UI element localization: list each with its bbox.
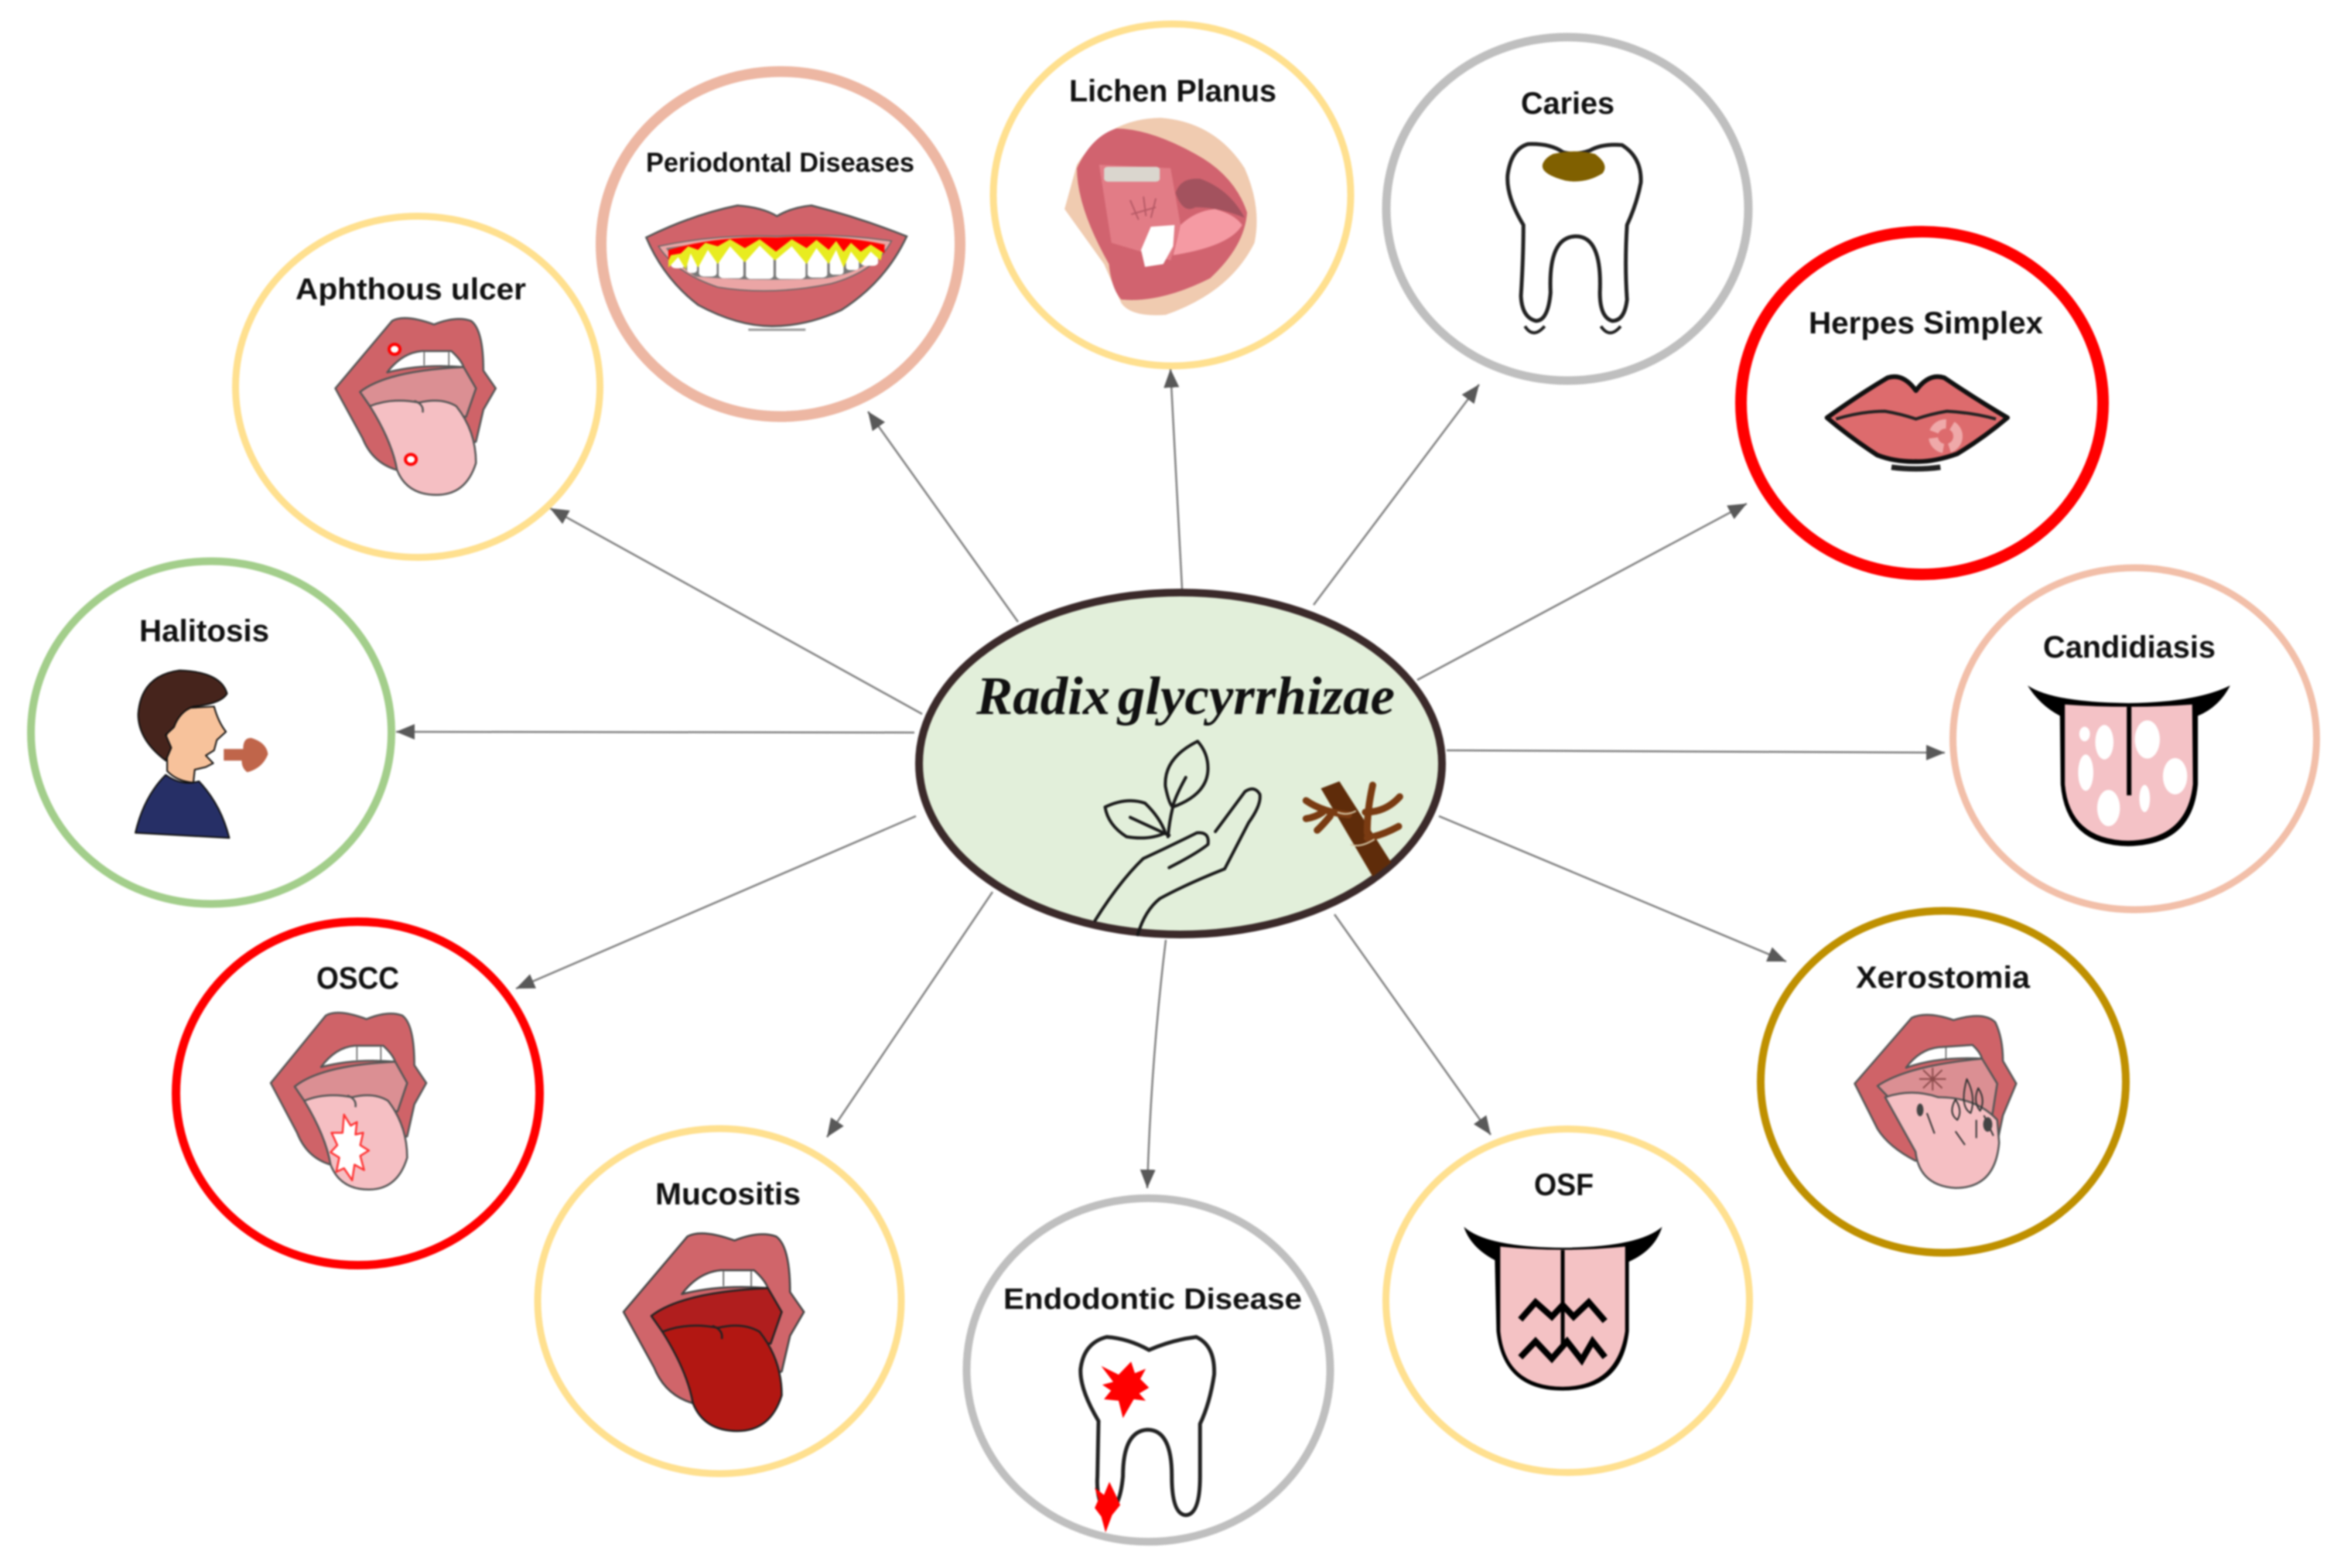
- panel: OSF: [1386, 1129, 1750, 1473]
- icon: smile with inflamed gums: [646, 206, 907, 330]
- icon: tooth with cavity: [1508, 144, 1641, 333]
- panel: Endodontic Disease: [967, 1198, 1331, 1542]
- panel: Halitosis: [31, 562, 391, 904]
- arrow: to Xerostomia: [1439, 816, 1786, 962]
- heading: Radix glycyrrhizae: Radix glycyrrhizae: [976, 667, 1395, 726]
- arrow: to Lichen Planus: [1170, 369, 1182, 589]
- arrow: to Periodontal Diseases: [868, 412, 1018, 622]
- panel: Periodontal Diseases: [601, 71, 960, 416]
- icon: mouth with ulcers: [336, 318, 496, 495]
- panel: Mucositis: [538, 1129, 901, 1474]
- icon: lips with cold sore: [1827, 377, 2007, 469]
- panel: Candidiasis: [1953, 568, 2316, 910]
- label: Aphthous ulcer: Aphthous ulcer: [296, 273, 526, 306]
- arrow: to Aphthous ulcer: [550, 508, 922, 714]
- label: Caries: Caries: [1521, 87, 1614, 121]
- panel: Xerostomia: [1761, 911, 2126, 1253]
- icon: licorice root: [1306, 781, 1399, 876]
- label: Mucositis: Mucositis: [655, 1177, 801, 1211]
- label: OSF: OSF: [1534, 1168, 1594, 1202]
- icon: tongue with white plaques: [2028, 685, 2230, 846]
- arrow: to Endodontic Disease: [1147, 940, 1166, 1188]
- panel: Caries: [1386, 37, 1748, 381]
- icon: hand holding plant: [1095, 741, 1260, 934]
- icon: open cheek with white patches: [1064, 118, 1257, 315]
- panel: Aphthous ulcer: [235, 217, 600, 557]
- arrow: to Halitosis: [396, 732, 914, 733]
- arrow: to Candidiasis: [1447, 750, 1945, 753]
- arrow: to Caries: [1314, 384, 1479, 605]
- icon: dry mouth: [1855, 1015, 2016, 1188]
- panel: OSCC: [176, 922, 540, 1266]
- label: Candidiasis: Candidiasis: [2043, 630, 2216, 664]
- arrow: to Herpes Simplex: [1417, 504, 1747, 680]
- label: Endodontic Disease: Endodontic Disease: [1003, 1283, 1302, 1316]
- label: Lichen Planus: Lichen Planus: [1069, 74, 1276, 108]
- icon: person with bad breath: [135, 671, 268, 838]
- arrow: to OSF: [1334, 914, 1491, 1135]
- panel: Herpes Simplex: [1741, 232, 2103, 574]
- label: Herpes Simplex: Herpes Simplex: [1809, 306, 2043, 340]
- icon: tongue with fibrosis bands: [1464, 1227, 1662, 1391]
- label: OSCC: OSCC: [316, 962, 399, 996]
- panel: central Radix glycyrrhizae: [919, 593, 1442, 934]
- label: Halitosis: Halitosis: [139, 614, 269, 648]
- label: Periodontal Diseases: Periodontal Diseases: [646, 148, 914, 178]
- icon: mouth with tongue lesion: [271, 1013, 426, 1190]
- panel: Lichen Planus: [993, 24, 1351, 366]
- arrow: to Mucositis: [827, 892, 993, 1137]
- icon: mouth with inflamed tongue: [624, 1233, 804, 1431]
- label: Xerostomia: Xerostomia: [1856, 961, 2031, 995]
- icon: tooth with infection: [1081, 1337, 1215, 1532]
- arrow: to OSCC: [516, 816, 916, 989]
